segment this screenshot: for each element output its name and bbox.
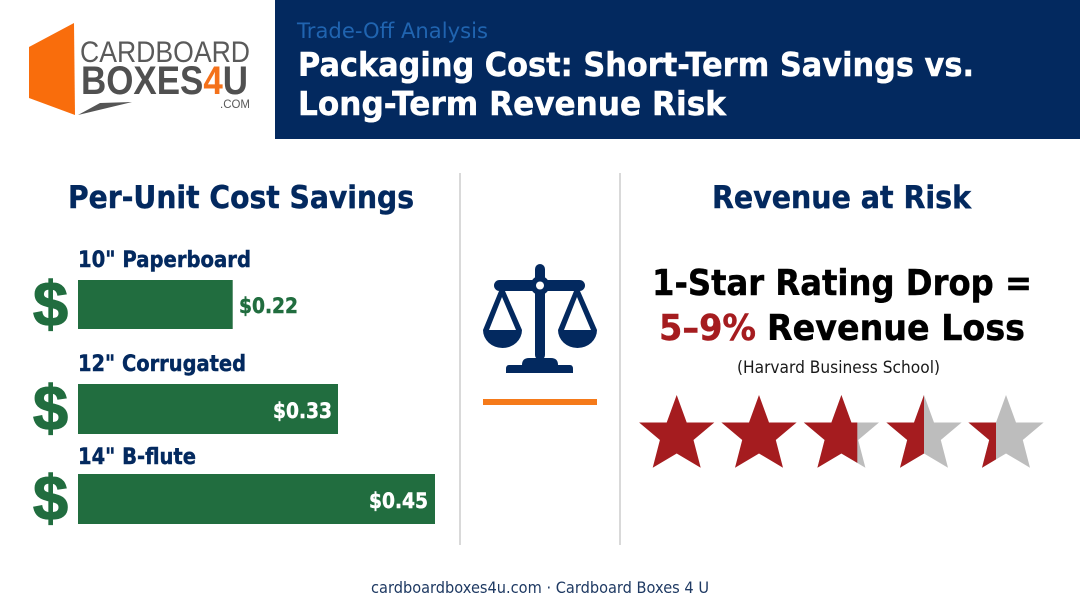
callout xyxy=(652,263,1032,349)
row: 12 inch corrugated: $ xyxy=(33,374,68,444)
footer: cardboardboxes4u.com · Cardboard Boxes 4 U xyxy=(371,578,709,597)
orange divider xyxy=(483,399,597,405)
row: 14 inch b-flute xyxy=(33,445,435,534)
source: (Harvard Business School) xyxy=(737,358,940,377)
eyebrow: Trade-Off Analysis xyxy=(296,19,488,43)
callout: 1-Star Rating Drop = xyxy=(652,263,1032,304)
panel: per-unit cost savings xyxy=(33,180,435,534)
icon: orange box xyxy=(29,23,75,115)
header banner xyxy=(275,0,1080,139)
callout: Revenue Loss xyxy=(767,308,1025,349)
callout: 5–9% xyxy=(659,308,756,349)
logo xyxy=(29,23,250,115)
title xyxy=(298,45,974,123)
row: 14 inch b-flute: $0.45 xyxy=(369,489,428,513)
row: 10 inch paperboard: $ xyxy=(33,270,68,340)
icon: swoosh xyxy=(78,102,132,115)
row: 12 inch corrugated: $0.33 xyxy=(273,399,332,423)
row: 12 inch corrugated xyxy=(33,352,338,444)
heading: Per-Unit Cost Savings xyxy=(68,180,414,216)
row: 14 inch b-flute: 14" B-flute xyxy=(78,445,196,470)
logo text: cardboard: CARDBOARD xyxy=(80,36,250,69)
logo text: boxes4u: BOXES4U xyxy=(81,59,248,103)
panel: revenue at risk xyxy=(639,180,1044,468)
row: 14 inch b-flute: $ xyxy=(33,464,68,534)
row: 10 inch paperboard xyxy=(33,248,298,340)
row: 12 inch corrugated: 12" Corrugated xyxy=(78,352,246,377)
logo text: .com: .COM xyxy=(220,99,250,111)
title: Long-Term Revenue Risk xyxy=(298,84,727,123)
icon: balance scale xyxy=(483,264,597,373)
row: 10 inch paperboard: $0.22 xyxy=(239,294,298,318)
title: Packaging Cost: Short-Term Savings vs. xyxy=(298,45,974,84)
star rating xyxy=(639,395,1044,468)
heading: Revenue at Risk xyxy=(712,180,972,216)
row: 10 inch paperboard: 10" Paperboard xyxy=(78,248,251,273)
